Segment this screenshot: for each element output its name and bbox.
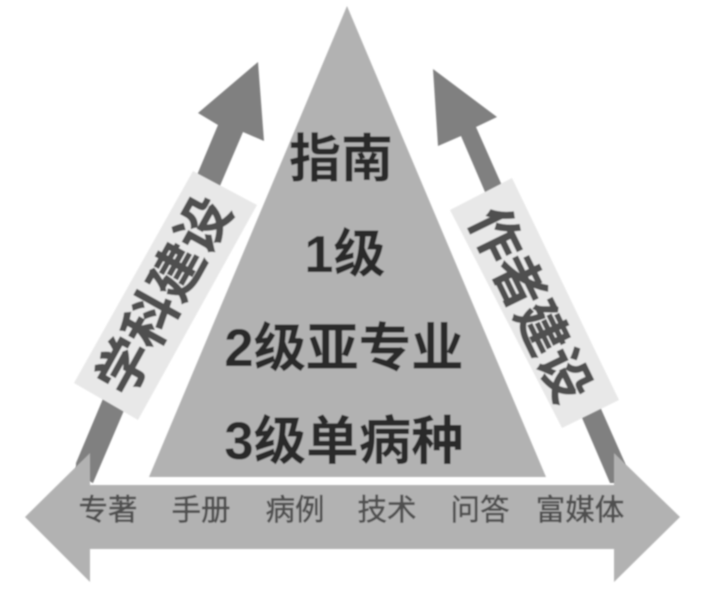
left upward arrow	[76, 62, 264, 483]
right label: 作者建设: 作者建设	[457, 199, 601, 412]
format label: 问答: 问答	[450, 494, 510, 527]
format label: 技术: 技术	[357, 494, 417, 527]
format label: 专著: 专著	[78, 494, 138, 527]
right upward arrow	[433, 69, 625, 483]
pyramid level: 2级亚专业: 2级亚专业	[224, 319, 464, 378]
pyramid level: 3级单病种: 3级单病种	[224, 412, 464, 471]
left label: 学科建设: 学科建设	[86, 187, 244, 405]
pyramid level: 1级: 1级	[305, 226, 385, 284]
pyramid level: 指南: 指南	[289, 131, 393, 189]
format label: 手册: 手册	[171, 494, 231, 527]
pyramid triangle	[149, 6, 546, 477]
format label: 病例: 病例	[265, 494, 325, 527]
format label: 富媒体: 富媒体	[536, 494, 624, 527]
bottom double arrow	[25, 453, 680, 582]
